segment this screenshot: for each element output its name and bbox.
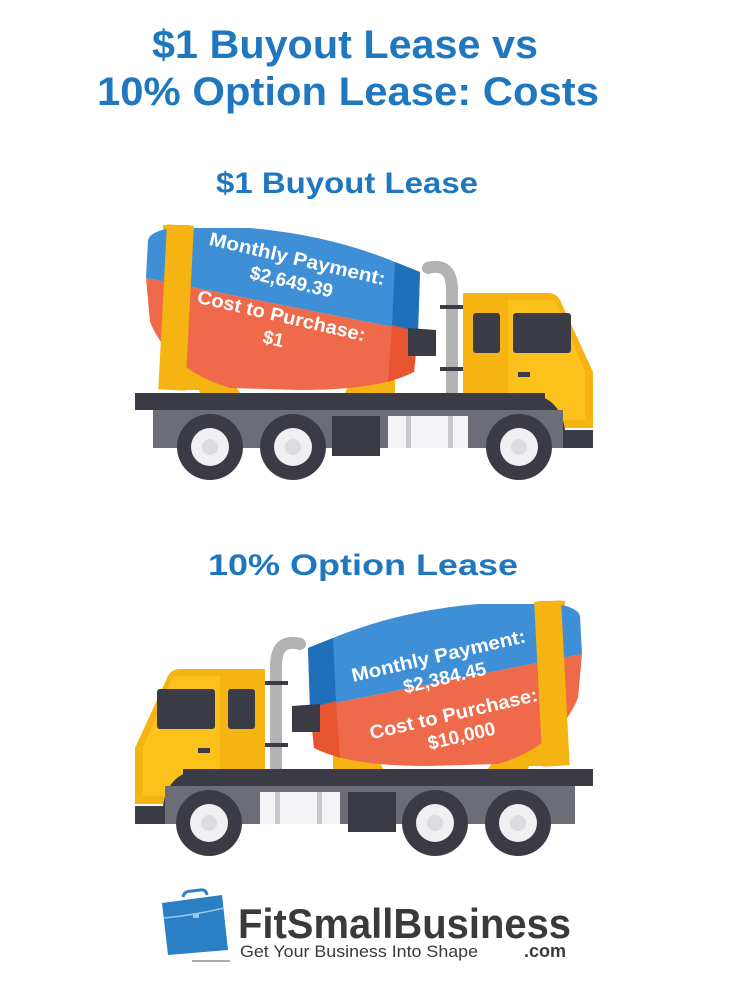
truck 1 [135,224,593,480]
title: 10% Option Lease: Costs [97,70,599,114]
drum labels 2 [350,626,540,755]
drum labels 1: $2,649.39 [248,263,335,302]
heading: 10% option lease: 10% Option Lease [208,549,518,582]
drum labels 2: Cost to Purchase: [368,685,540,744]
logo: .com [524,941,566,961]
drum labels 2: $10,000 [426,719,498,755]
icon: briefcase [162,890,230,962]
drum labels 1: $1 [261,327,286,352]
logo: Get Your Business Into Shape [240,942,478,961]
drum labels 2: Monthly Payment: [350,626,528,687]
logo: FitSmallBusiness [238,900,571,947]
drum labels 1: Monthly Payment: [207,229,387,290]
heading: $1 buyout lease: $1 Buyout Lease [216,167,478,200]
title [97,23,599,114]
truck 2 [135,600,593,856]
title: $1 Buyout Lease vs [152,23,538,67]
logo [162,890,571,962]
drum labels 1 [195,229,387,352]
drum labels 1: Cost to Purchase: [195,287,367,346]
drum labels 2: $2,384.45 [401,659,489,698]
